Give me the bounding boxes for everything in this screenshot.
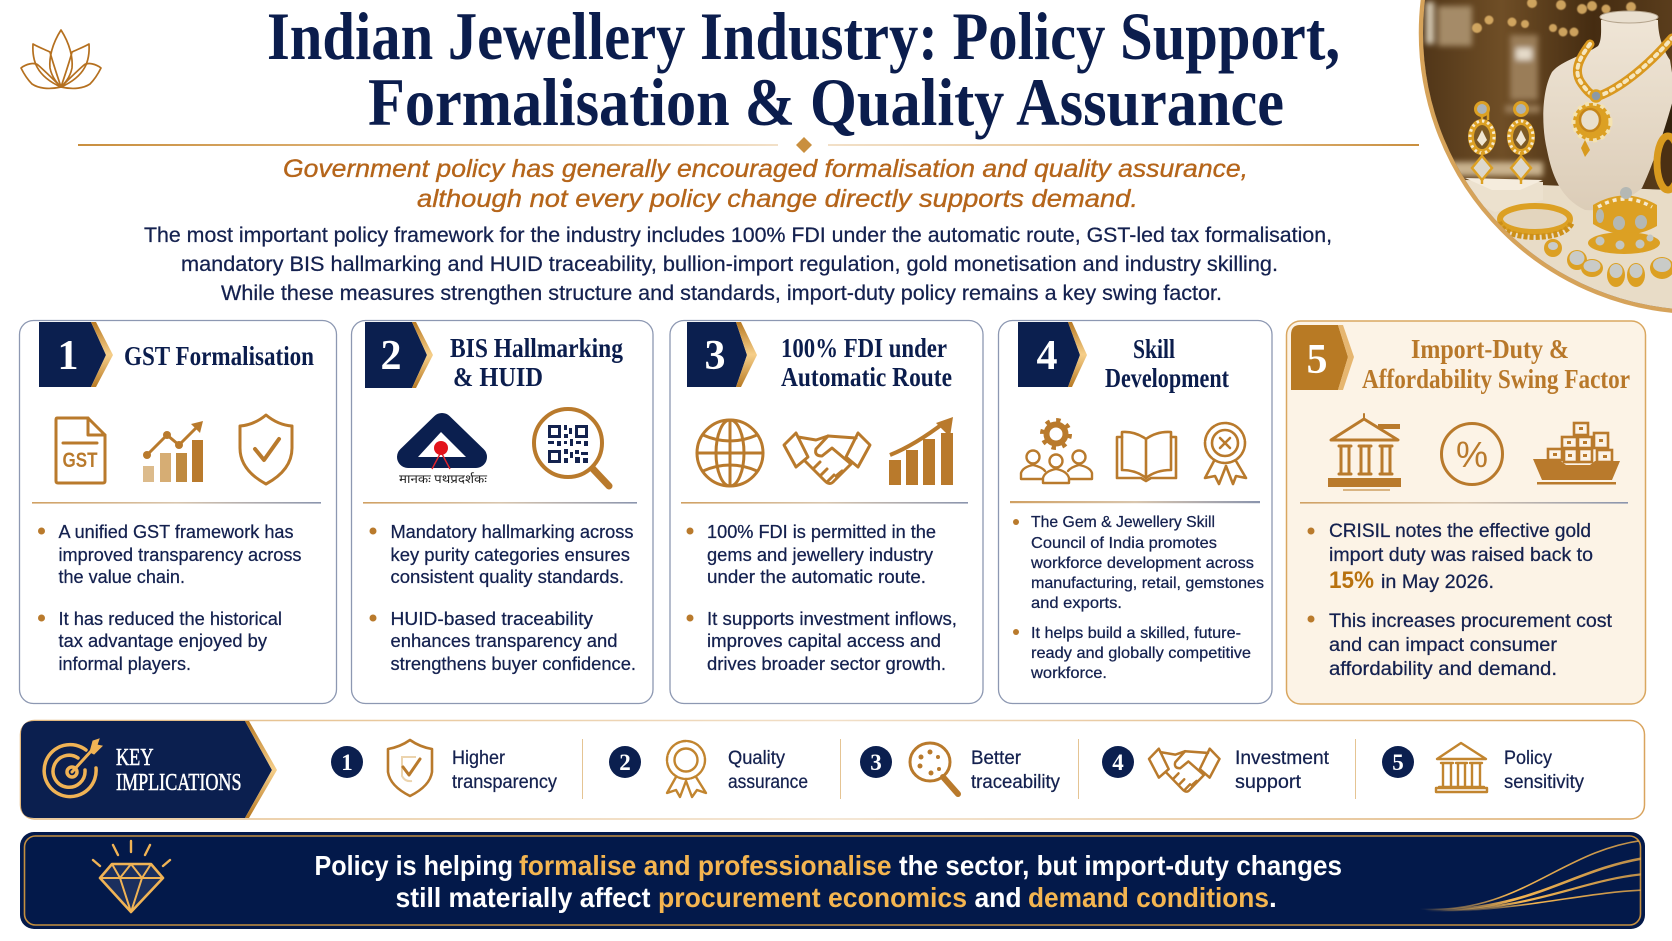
bullets: import duty was raised back to xyxy=(1329,545,1593,566)
bullets: HUID-based traceability xyxy=(390,609,593,629)
photo: gold jewellery display xyxy=(1410,0,1672,330)
bullets: It helps build a skilled, future- xyxy=(1031,625,1241,642)
heading xyxy=(450,333,623,392)
implication 3: 3 xyxy=(870,750,882,775)
badge 1: 1 xyxy=(58,333,78,379)
bullets: gems and jewellery industry xyxy=(707,545,933,565)
icon: rising chart xyxy=(889,417,953,485)
implication 1: Higher xyxy=(452,747,505,769)
icon: shield check xyxy=(240,415,292,484)
panel: BIS Hallmarking & HUID xyxy=(352,320,653,704)
heading xyxy=(781,333,952,392)
earring right xyxy=(1509,102,1533,184)
heading: BIS Hallmarking xyxy=(450,333,623,363)
bullets: strengthens buyer confidence. xyxy=(390,654,636,674)
implication 4 xyxy=(1102,746,1330,793)
heading: GST Formalisation xyxy=(124,341,314,371)
bullets: It supports investment inflows, xyxy=(707,609,957,629)
implication 1: 1 xyxy=(341,750,353,775)
intro text: The most important policy framework for the industry includes 100% FDI under the automatic route, GST-led tax formalisation, xyxy=(144,224,1332,247)
panel: key implications band xyxy=(20,720,1644,819)
bullets: The Gem & Jewellery Skill xyxy=(1031,514,1215,531)
bullets: ready and globally competitive xyxy=(1031,645,1251,662)
bullets: key purity categories ensures xyxy=(390,545,630,565)
icon: container ship xyxy=(1533,423,1620,484)
panel: GST Formalisation xyxy=(20,320,336,704)
panel: 100% FDI under Automatic Route xyxy=(670,320,983,704)
subtitle: although not every policy change directly supports demand. xyxy=(417,185,1138,213)
bullets: in May 2026. xyxy=(1381,572,1494,593)
badge 2 xyxy=(365,322,433,388)
heading xyxy=(1105,334,1229,393)
conclusion text: demand conditions xyxy=(1028,882,1269,913)
icon: diamond with rays xyxy=(93,841,170,912)
swoosh decoration xyxy=(1420,840,1645,911)
counter xyxy=(1478,185,1672,309)
icon: growth chart xyxy=(143,421,203,482)
badge 5: 5 xyxy=(1306,337,1328,383)
icon: QR magnifier xyxy=(534,409,609,486)
key implications tab: KEY xyxy=(116,745,154,771)
implication 5: 5 xyxy=(1392,750,1404,775)
implication 5: sensitivity xyxy=(1504,771,1584,793)
icon: rosette xyxy=(1205,423,1246,484)
icon: open book xyxy=(1117,432,1176,481)
bullets xyxy=(686,522,957,674)
heading xyxy=(1362,334,1630,394)
conclusion text: procurement economics xyxy=(658,882,967,913)
badge 3 xyxy=(687,322,757,387)
badge 3: 3 xyxy=(704,333,726,379)
implication 2: Quality xyxy=(728,747,785,769)
bullets: 15% xyxy=(1329,567,1374,594)
implication 2 xyxy=(609,741,808,797)
panel: Import-Duty & Affordability Swing Factor xyxy=(1286,321,1646,704)
icon: percent xyxy=(1442,424,1502,484)
right jewel xyxy=(1657,136,1672,190)
earring left xyxy=(1470,102,1494,184)
pendant xyxy=(1573,103,1611,141)
implication 4: support xyxy=(1235,771,1302,793)
badge 1 xyxy=(39,322,113,387)
icon: people with gear xyxy=(1021,420,1092,483)
bullets: consistent quality standards. xyxy=(390,567,624,587)
heading: Automatic Route xyxy=(781,362,952,392)
bullets: and can impact consumer xyxy=(1329,635,1558,656)
bullets: improves capital access and xyxy=(707,631,941,651)
badge 5 xyxy=(1291,325,1354,390)
conclusion text: still materially affect xyxy=(396,882,650,913)
icon: GST document: GST xyxy=(62,449,98,472)
bangles and rings xyxy=(1500,206,1570,232)
key implications tab xyxy=(21,721,277,818)
icon: lotus logo xyxy=(21,30,101,88)
icon: target xyxy=(44,739,102,797)
implication 5 xyxy=(1382,743,1584,793)
bullets xyxy=(1308,521,1613,680)
heading: Affordability Swing Factor xyxy=(1362,364,1630,394)
title xyxy=(267,0,1340,140)
conclusion text xyxy=(314,850,1342,913)
implication 5: Policy xyxy=(1504,747,1552,769)
heading: Skill xyxy=(1133,334,1175,364)
conclusion text: and xyxy=(974,882,1022,913)
bullets: workforce development across xyxy=(1030,555,1254,572)
bullets: Mandatory hallmarking across xyxy=(390,522,634,542)
conclusion text: formalise and professionalise xyxy=(519,850,892,881)
implication 3: traceability xyxy=(971,771,1060,793)
icon: government building xyxy=(1328,414,1401,491)
bullets: CRISIL notes the effective gold xyxy=(1329,521,1591,542)
bullets: the value chain. xyxy=(58,567,185,587)
icon: handshake xyxy=(784,433,870,484)
heading: Import-Duty & xyxy=(1411,334,1569,364)
bullets: It has reduced the historical xyxy=(58,609,282,629)
implication 3: Better xyxy=(971,747,1021,769)
icon: percent: % xyxy=(1456,434,1488,475)
bullets xyxy=(38,522,302,674)
bullets xyxy=(1013,514,1264,682)
intro text: mandatory BIS hallmarking and HUID traceability, bullion-import regulation, gold monetisation and industry skilling. xyxy=(181,253,1278,276)
implication 2: assurance xyxy=(728,771,808,793)
badge 4: 4 xyxy=(1036,333,1058,379)
subtitle xyxy=(283,155,1248,213)
icon: BIS logo xyxy=(399,424,488,486)
badge 4 xyxy=(1018,322,1087,387)
title: Formalisation & Quality Assurance xyxy=(368,64,1284,140)
badge 2: 2 xyxy=(380,333,402,379)
conclusion text: the sector, but import-duty changes xyxy=(899,850,1342,881)
necklace xyxy=(1577,38,1672,97)
heading: Development xyxy=(1105,363,1229,393)
icon: globe xyxy=(697,420,763,486)
bullets: affordability and demand. xyxy=(1329,659,1557,680)
bullets: This increases procurement cost xyxy=(1329,611,1613,632)
bullets: 100% FDI is permitted in the xyxy=(707,522,936,542)
intro text: While these measures strengthen structure and standards, import-duty policy remains a key swing factor. xyxy=(221,282,1222,305)
bullets: improved transparency across xyxy=(58,545,302,565)
bullets: manufacturing, retail, gemstones xyxy=(1031,575,1264,592)
bust xyxy=(1543,20,1672,210)
panel: Skill Development xyxy=(998,320,1272,704)
bullets: workforce. xyxy=(1030,665,1107,682)
conclusion text: . xyxy=(1269,882,1277,913)
bullets xyxy=(370,522,636,674)
implication 4: 4 xyxy=(1112,750,1124,775)
bullets: under the automatic route. xyxy=(707,567,926,587)
panel: conclusion banner xyxy=(20,832,1645,929)
bullets: A unified GST framework has xyxy=(58,522,294,542)
implication 1 xyxy=(331,740,557,796)
title divider with diamond xyxy=(78,137,1419,153)
bullets: tax advantage enjoyed by xyxy=(58,631,267,651)
bullets: enhances transparency and xyxy=(390,631,618,651)
bullets: Council of India promotes xyxy=(1031,535,1217,552)
bullets: and exports. xyxy=(1031,595,1122,612)
jewellery box xyxy=(1465,180,1543,208)
icon: BIS logo: मानकः पथप्रदर्शकः xyxy=(399,472,488,486)
heading: 100% FDI under xyxy=(781,333,947,363)
subtitle: Government policy has generally encouraged formalisation and quality assurance, xyxy=(283,155,1248,183)
key implications tab: IMPLICATIONS xyxy=(116,770,242,796)
bullets: drives broader sector growth. xyxy=(707,654,946,674)
implication 2: 2 xyxy=(619,750,631,775)
implication 1: transparency xyxy=(452,771,557,793)
implication 4: Investment xyxy=(1235,747,1330,769)
implication 3 xyxy=(860,743,1060,794)
icon: GST document xyxy=(56,418,105,483)
intro text xyxy=(144,224,1332,305)
conclusion text: Policy is helping xyxy=(314,850,513,881)
bullets: informal players. xyxy=(58,654,191,674)
title: Indian Jewellery Industry: Policy Support, xyxy=(267,0,1340,74)
heading: & HUID xyxy=(453,362,543,392)
